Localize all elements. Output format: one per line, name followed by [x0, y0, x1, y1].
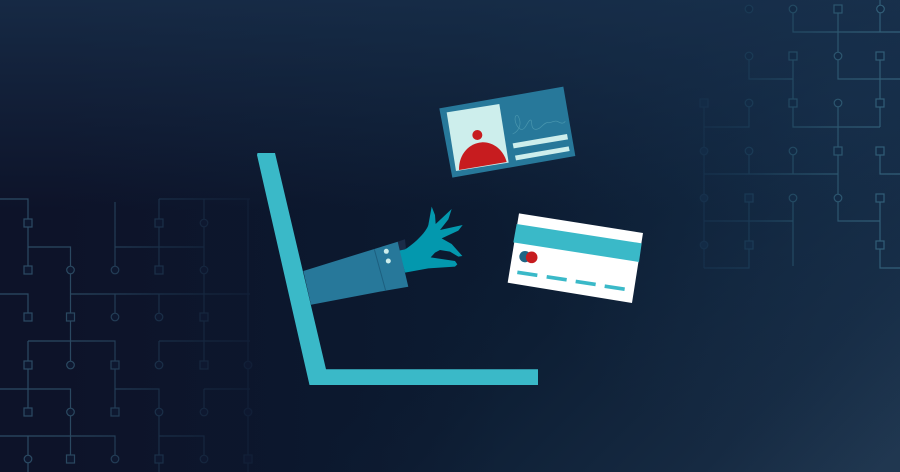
icon: ID card: [439, 87, 575, 178]
cuff buttons: [384, 249, 391, 264]
card body: [508, 213, 643, 303]
circuit pattern: bottom left: [0, 199, 252, 472]
hand: [399, 207, 463, 273]
icon: laptop outline: [257, 153, 538, 385]
icon: credit card: [508, 213, 643, 303]
card logo: [519, 251, 537, 263]
card body: [439, 87, 575, 178]
person: [459, 130, 507, 170]
icon: arm reaching from laptop: [303, 207, 463, 305]
card number dashes: [517, 272, 625, 289]
circuit pattern: top right: [700, 0, 900, 268]
cuff shadow: [397, 239, 406, 251]
signature: [513, 115, 565, 134]
photo area: [447, 104, 509, 171]
sleeve: [303, 242, 408, 305]
cuff seam: [374, 249, 386, 291]
text lines: [513, 134, 570, 160]
magnetic stripe: [513, 224, 642, 262]
